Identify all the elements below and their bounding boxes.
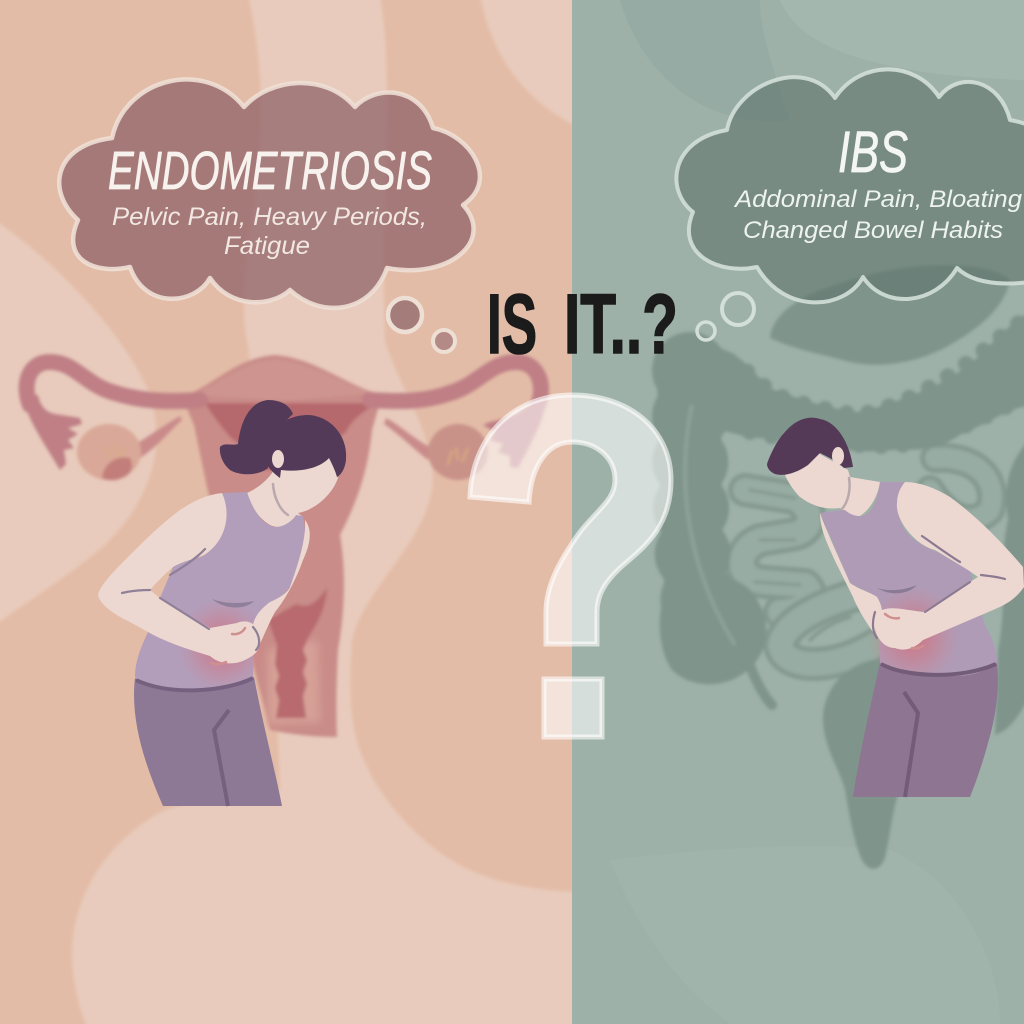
- woman finger crease: [211, 628, 245, 664]
- man finger crease: [885, 614, 923, 648]
- figure: man with abdominal pain: [767, 418, 1024, 797]
- illustration: uterus anatomy: [22, 355, 547, 737]
- left fallopian tube: [27, 362, 200, 405]
- left fimbriae: [22, 395, 82, 470]
- thought bubble small left: [433, 330, 455, 352]
- man trousers: [853, 663, 998, 797]
- transverse colon: [655, 312, 1024, 451]
- heading: is it: IS: [487, 277, 537, 371]
- endometrium lining: [268, 640, 320, 724]
- woman tank top: [135, 492, 305, 690]
- appendix: [748, 660, 772, 705]
- panel: endometriosis background: [0, 0, 580, 1024]
- left ovary: [77, 416, 182, 480]
- man neck crease: [842, 478, 850, 509]
- woman ear: [272, 450, 284, 468]
- woman bent arm: [98, 493, 260, 663]
- woman neck crease: [273, 484, 288, 515]
- symptom line: bowel habits: Changed Bowel Habits: [743, 217, 1003, 244]
- man torso crease: [877, 585, 917, 593]
- symptom line: fatigue: Fatigue: [224, 232, 310, 260]
- uterine dome highlight: [190, 360, 375, 400]
- caecum: [660, 575, 766, 684]
- right ovary: [384, 418, 488, 480]
- woman hair: [265, 415, 346, 478]
- lower cavity and cervical canal: [268, 588, 327, 718]
- right fallopian tube: [370, 362, 541, 405]
- cloud: endometriosis: [59, 79, 480, 308]
- ascending colon: [690, 370, 715, 650]
- man bent arm: [874, 482, 1024, 650]
- thought bubble large right: [722, 293, 754, 325]
- man trouser details: [881, 664, 996, 797]
- uterine cavity: [205, 403, 378, 470]
- ascending colon highlight: [685, 405, 735, 645]
- panel: IBS background: [572, 0, 1024, 1024]
- ponytail: [220, 400, 293, 474]
- woman skin: neck and face: [247, 458, 338, 527]
- woman torso crease: [212, 599, 254, 608]
- rectum: [823, 660, 910, 869]
- man ear: [832, 447, 844, 465]
- woman trousers: [134, 677, 282, 806]
- heading: is it: [487, 277, 678, 371]
- stomach shape: [770, 265, 1010, 365]
- heading: endometriosis: ENDOMETRIOSIS: [108, 141, 432, 201]
- question mark dot: [544, 679, 602, 737]
- small intestine left loops: [742, 458, 992, 664]
- symptoms: IBS: Addominal Pain, Bloating: [733, 186, 1023, 213]
- heading: is it: IT..?: [564, 277, 678, 371]
- man far arm: [820, 513, 882, 635]
- descending colon right: [995, 440, 1024, 735]
- cloud: IBS: [676, 69, 1024, 302]
- abdominal pain glow: [867, 586, 959, 686]
- man tank top: [820, 482, 997, 676]
- woman trouser details: [136, 678, 253, 806]
- woman clothing creases: [122, 549, 259, 650]
- abdominal pain glow: [177, 597, 267, 693]
- figure: woman with abdominal pain: [98, 400, 346, 806]
- illustration: intestines anatomy: [655, 265, 1024, 869]
- man clothing creases: [873, 536, 1005, 638]
- woman far arm: [253, 520, 310, 648]
- thought bubble small right: [697, 322, 715, 340]
- uterus body: [182, 355, 382, 737]
- icon: large question mark: [470, 395, 671, 737]
- man hair: [767, 418, 853, 475]
- right fimbriae: [483, 395, 547, 468]
- symptoms: endometriosis: Pelvic Pain, Heavy Periods,: [112, 203, 427, 231]
- heading: IBS: IBS: [838, 120, 908, 185]
- man skin: neck and face: [785, 453, 880, 516]
- thought bubble large left: [388, 298, 422, 332]
